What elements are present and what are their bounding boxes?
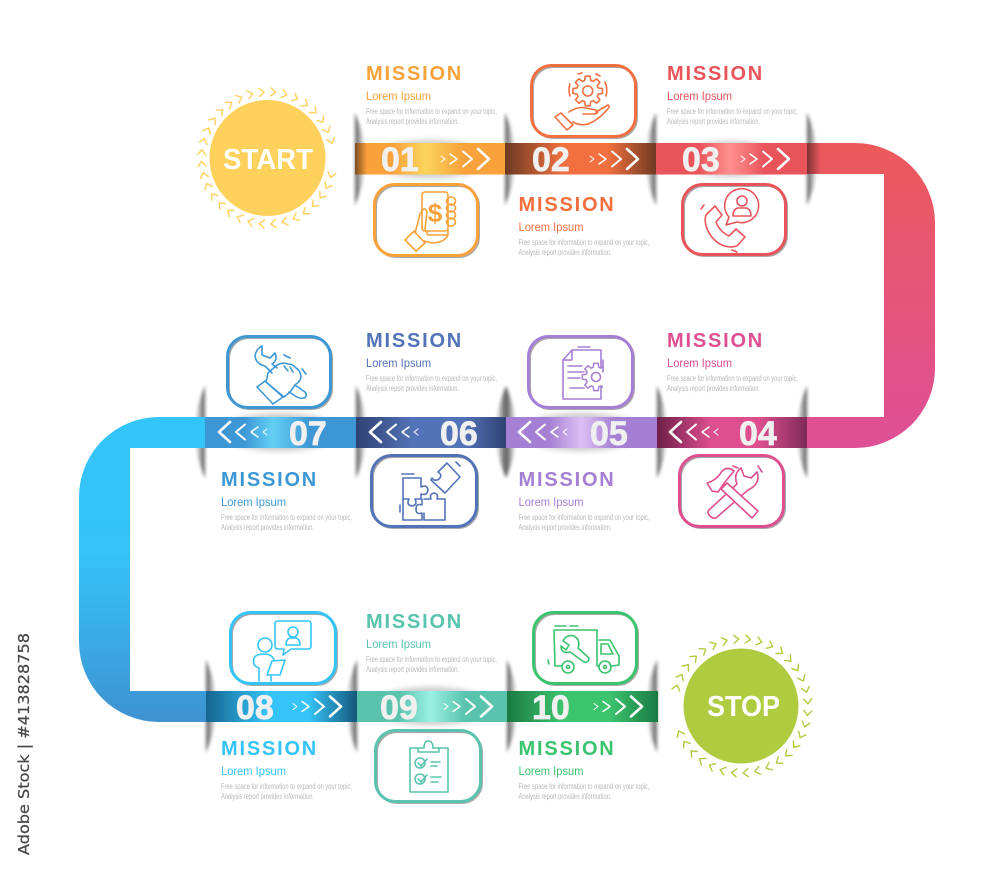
band segment 01: [355, 143, 505, 174]
arrows 06: [370, 422, 418, 442]
road curve: right side: [807, 143, 935, 448]
text block 01: Free space for information to expand on your topic,: [366, 107, 497, 116]
step 08: [206, 612, 357, 801]
text block 07: [221, 469, 352, 532]
text block 04: Analysis report provides information.: [667, 384, 760, 393]
stop chevron ring: [672, 635, 812, 777]
number 06: 06: [440, 415, 478, 453]
arrows 10: [594, 696, 642, 716]
icon box 01: [374, 184, 479, 257]
step 05: [506, 336, 657, 532]
side credit text: Adobe Stock | #413828758: [15, 633, 33, 855]
band segment 02: [505, 143, 656, 174]
start chevron ring: [198, 88, 336, 228]
text block 10: MISSION: [518, 738, 616, 760]
step 01: [355, 63, 505, 257]
text block 01: Analysis report provides information.: [366, 117, 459, 126]
band segment 07: [205, 417, 356, 448]
step 02: [505, 66, 656, 257]
step 06: [356, 330, 506, 528]
icon: clipboard checklist: [410, 741, 448, 792]
text block 08: Lorem Ipsum: [221, 766, 286, 778]
icon box 05: [528, 336, 634, 409]
text block 10: Free space for information to expand on your topic,: [518, 782, 650, 791]
text block 04: Free space for information to expand on your topic,: [667, 374, 798, 383]
road curve: left side: [79, 417, 206, 722]
text block 07: Lorem Ipsum: [221, 497, 286, 509]
text block 02: Free space for information to expand on your topic,: [518, 238, 650, 247]
text block 06: Lorem Ipsum: [366, 358, 431, 370]
band segment 09: [357, 691, 507, 722]
number 08: 08: [236, 689, 274, 727]
text block 09: Lorem Ipsum: [366, 639, 431, 651]
arrows 01: [441, 149, 489, 169]
band segment 03: [656, 143, 807, 174]
text block 04: MISSION: [667, 330, 764, 352]
number 04: 04: [739, 415, 777, 453]
text block 03: Free space for information to expand on your topic,: [667, 107, 798, 116]
text block 08: Free space for information to expand on your topic,: [221, 782, 352, 791]
text block 06: [366, 330, 497, 393]
text block 02: MISSION: [518, 194, 616, 216]
text block 01: Lorem Ipsum: [366, 91, 431, 103]
text block 03: Lorem Ipsum: [667, 91, 732, 103]
arrows 05: [519, 422, 567, 442]
number 02: 02: [532, 141, 570, 179]
text block 03: Analysis report provides information.: [667, 117, 760, 126]
text block 01: MISSION: [366, 63, 463, 85]
start badge: [198, 88, 336, 228]
stop circle: [684, 648, 798, 764]
band segment 04: [657, 417, 807, 448]
step 10: [507, 612, 658, 801]
text block 09: [366, 611, 497, 674]
step 09: [357, 611, 507, 803]
number 10: 10: [532, 689, 570, 727]
icon: crossed hammer and wrench: [707, 466, 762, 518]
band segment 08: [206, 691, 357, 722]
icon box 10: [534, 612, 638, 685]
text block 10: Lorem Ipsum: [518, 766, 584, 778]
icon box 06: [372, 456, 478, 528]
arrows 08: [293, 696, 341, 716]
arrows 03: [741, 149, 789, 169]
text block 06: MISSION: [366, 330, 463, 352]
text block 05: Lorem Ipsum: [518, 497, 584, 509]
number 05: 05: [590, 415, 628, 453]
text block 05: Analysis report provides information.: [518, 523, 612, 532]
icon box 04: [680, 456, 785, 528]
arrows 07: [219, 422, 267, 442]
icon box 08: [230, 612, 337, 685]
stop badge: [672, 635, 812, 777]
step 04: [657, 330, 807, 528]
text block 09: Free space for information to expand on your topic,: [366, 655, 497, 664]
text block 06: Analysis report provides information.: [366, 384, 459, 393]
stop label: STOP: [707, 691, 780, 723]
text block 10: [518, 738, 650, 801]
icon box 07: [228, 336, 332, 409]
icon: puzzle pieces: [400, 462, 460, 520]
icon box 03: [682, 184, 787, 256]
text block 04: [667, 330, 798, 393]
icon box 09: [376, 730, 482, 803]
soft band shadows: [220, 140, 781, 725]
icon: document with gear: [563, 347, 610, 399]
icon box 02: [532, 66, 637, 138]
text block 02: [518, 194, 650, 257]
text block 05: MISSION: [518, 469, 616, 491]
text block 02: Lorem Ipsum: [518, 222, 584, 234]
text block 09: MISSION: [366, 611, 463, 633]
side fold shadows: [195, 113, 817, 752]
text block 01: [366, 63, 497, 126]
text block 08: Analysis report provides information.: [221, 792, 314, 801]
number 01: 01: [381, 141, 419, 179]
icon: repair truck: [548, 626, 619, 673]
text block 03: MISSION: [667, 63, 764, 85]
text block 07: Free space for information to expand on your topic,: [221, 513, 352, 522]
icon: gear on open hand: [555, 73, 609, 130]
icon: hand holding phone with dollar: $: [428, 198, 443, 228]
text block 04: Lorem Ipsum: [667, 358, 732, 370]
band segment 05: [506, 417, 657, 448]
number 03: 03: [682, 141, 720, 179]
text block 06: Free space for information to expand on your topic,: [366, 374, 497, 383]
band segment 10: [507, 691, 658, 722]
icon: person reading with speech bubble: [254, 621, 311, 681]
step 03: [656, 63, 807, 256]
start label: START: [223, 144, 313, 176]
text block 08: MISSION: [221, 738, 318, 760]
step 07: [205, 336, 356, 532]
fold shading on road: [807, 143, 821, 174]
text block 05: [518, 469, 650, 532]
number 09: 09: [380, 689, 418, 727]
text block 08: [221, 738, 352, 801]
start circle: [210, 100, 326, 216]
text block 05: Free space for information to expand on your topic,: [518, 513, 650, 522]
text block 07: Analysis report provides information.: [221, 523, 314, 532]
text block 07: MISSION: [221, 469, 318, 491]
text block 03: [667, 63, 798, 126]
text block 09: Analysis report provides information.: [366, 665, 459, 674]
band segment 06: [356, 417, 506, 448]
text block 10: Analysis report provides information.: [518, 792, 612, 801]
arrows 02: [590, 149, 638, 169]
icon: telephone handset and person bubble: [701, 189, 759, 252]
number 07: 07: [289, 415, 327, 453]
text block 02: Analysis report provides information.: [518, 248, 612, 257]
arrows 09: [444, 696, 492, 716]
icon: fist holding wrench: [255, 346, 306, 404]
arrows 04: [670, 422, 718, 442]
